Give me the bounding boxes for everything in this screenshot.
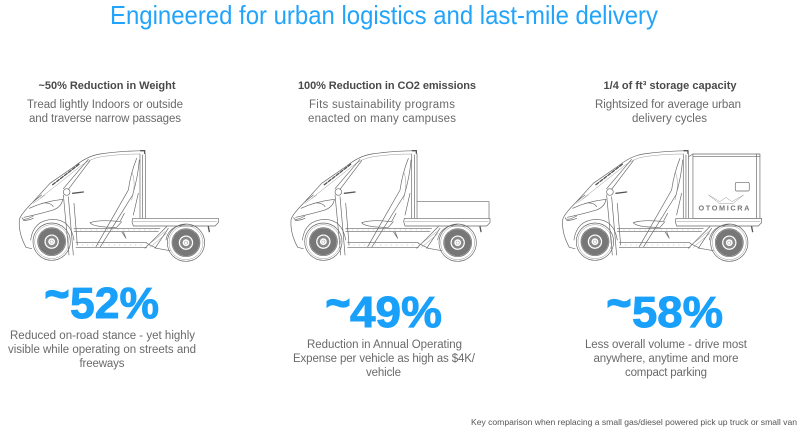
- statistic: 49 percent: ~: [326, 280, 350, 326]
- statistic: 58 percent: 58%: [632, 288, 723, 337]
- statistic: 58 percent: [607, 280, 723, 337]
- text block: volume: anywhere, anytime and more: [594, 353, 738, 365]
- statistic: 49 percent: [326, 280, 442, 337]
- footnote: Key comparison when replacing a small gas/diesel powered pick up truck or small van: [471, 417, 797, 427]
- panel: emissions reduction: [291, 80, 490, 379]
- heading: storage: 1/4 of ft³ storage capacity: [604, 80, 737, 92]
- heading: weight: ~50% Reduction in Weight: [38, 80, 176, 92]
- statistic: 49 percent: 49%: [350, 288, 442, 337]
- text block: operating expense: Reduction in Annual Operating: [307, 339, 462, 351]
- panel: weight reduction: [8, 80, 218, 370]
- statistic: 58 percent: ~: [607, 280, 631, 326]
- text block: storage: [595, 99, 741, 125]
- statistic: 52 percent: 52%: [70, 279, 159, 328]
- text block: weight: Tread lightly Indoors or outside: [27, 99, 183, 111]
- text block: operating expense: Expense per vehicle as high as $4K/: [293, 353, 476, 365]
- statistic: 52 percent: [45, 271, 159, 328]
- panel: storage capacity: [563, 80, 762, 379]
- icon: flatbed vehicle: [19, 151, 218, 261]
- icon: cargo box vehicle: OTOMICRA: [698, 204, 750, 213]
- statistic: 52 percent: ~: [45, 271, 69, 317]
- text block: stance: Reduced on-road stance - yet highly: [10, 330, 195, 342]
- text block: stance: visible while operating on streets and: [8, 344, 196, 356]
- text block: emissions: [308, 99, 456, 125]
- text block: stance: [8, 330, 196, 370]
- text block: storage: Rightsized for average urban: [595, 99, 741, 111]
- icon: cargo box vehicle: [563, 151, 762, 261]
- text block: storage: delivery cycles: [632, 113, 707, 125]
- text block: weight: [27, 99, 183, 125]
- text block: emissions: enacted on many campuses: [308, 113, 456, 125]
- text block: volume: Less overall volume - drive most: [585, 339, 748, 351]
- title: Engineered for urban logistics and last-mile delivery: [110, 0, 658, 30]
- text block: emissions: Fits sustainability programs: [309, 99, 455, 111]
- heading: emissions: 100% Reduction in CO2 emissions: [298, 80, 476, 92]
- text block: weight: and traverse narrow passages: [29, 113, 181, 125]
- text block: operating expense: vehicle: [366, 367, 401, 379]
- text block: volume: [585, 339, 748, 379]
- icon: pickup bed vehicle: [291, 151, 490, 261]
- text block: operating expense: [293, 339, 476, 379]
- text block: stance: freeways: [80, 358, 125, 370]
- text block: volume: compact parking: [625, 367, 707, 379]
